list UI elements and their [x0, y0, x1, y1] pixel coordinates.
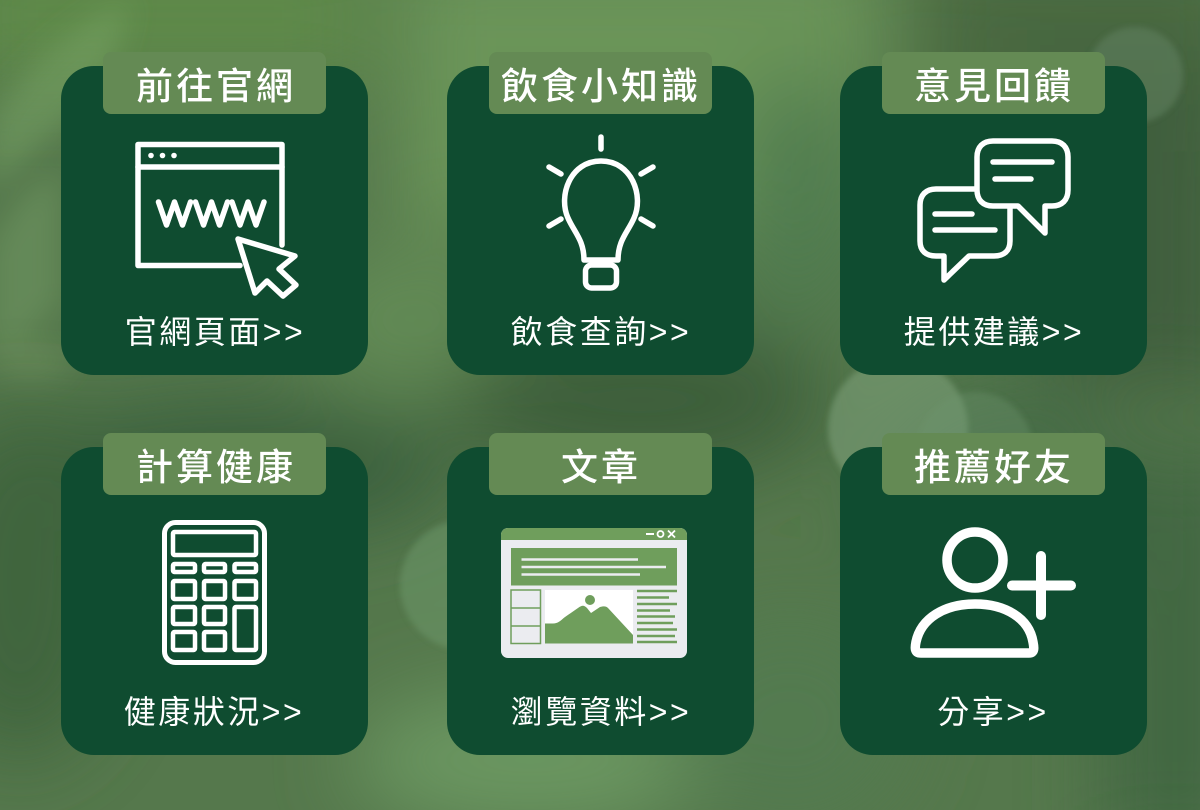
heading: 飲食小知識	[501, 66, 701, 107]
panel: articles	[447, 433, 754, 755]
icon: article web page	[501, 528, 687, 658]
icon: browser with www and cursor	[138, 144, 296, 296]
link label: 健康狀況>>	[124, 694, 304, 730]
heading tab	[103, 52, 326, 114]
link label: 飲食查詢>>	[511, 314, 691, 350]
link label: 分享>>	[937, 694, 1049, 730]
panel background	[447, 66, 754, 375]
heading: 意見回饋	[914, 66, 1074, 107]
panel background	[840, 447, 1147, 755]
heading tab	[489, 52, 712, 114]
panel background	[61, 66, 368, 375]
heading tab	[103, 433, 326, 495]
panel: official website	[61, 52, 368, 375]
heading tab	[489, 433, 712, 495]
panel background	[840, 66, 1147, 375]
heading tab	[882, 52, 1105, 114]
heading: 計算健康	[136, 447, 296, 488]
link label: 提供建議>>	[904, 314, 1084, 350]
icon: speech bubbles	[920, 141, 1068, 280]
heading: 前往官網	[136, 66, 296, 107]
panel: recommend friends	[840, 433, 1147, 755]
heading tab	[882, 433, 1105, 495]
heading: 推薦好友	[914, 447, 1074, 488]
heading: 文章	[561, 447, 641, 488]
panel background	[447, 447, 754, 755]
link label: 官網頁面>>	[125, 314, 305, 350]
icon: add user	[915, 532, 1071, 653]
link label: 瀏覽資料>>	[511, 694, 691, 730]
panel background	[61, 447, 368, 755]
icon: calculator	[164, 522, 264, 662]
panel: feedback	[840, 52, 1147, 375]
icon: light bulb	[549, 137, 653, 288]
panel: diet tips	[447, 52, 754, 375]
panel: health calculation	[61, 433, 368, 755]
